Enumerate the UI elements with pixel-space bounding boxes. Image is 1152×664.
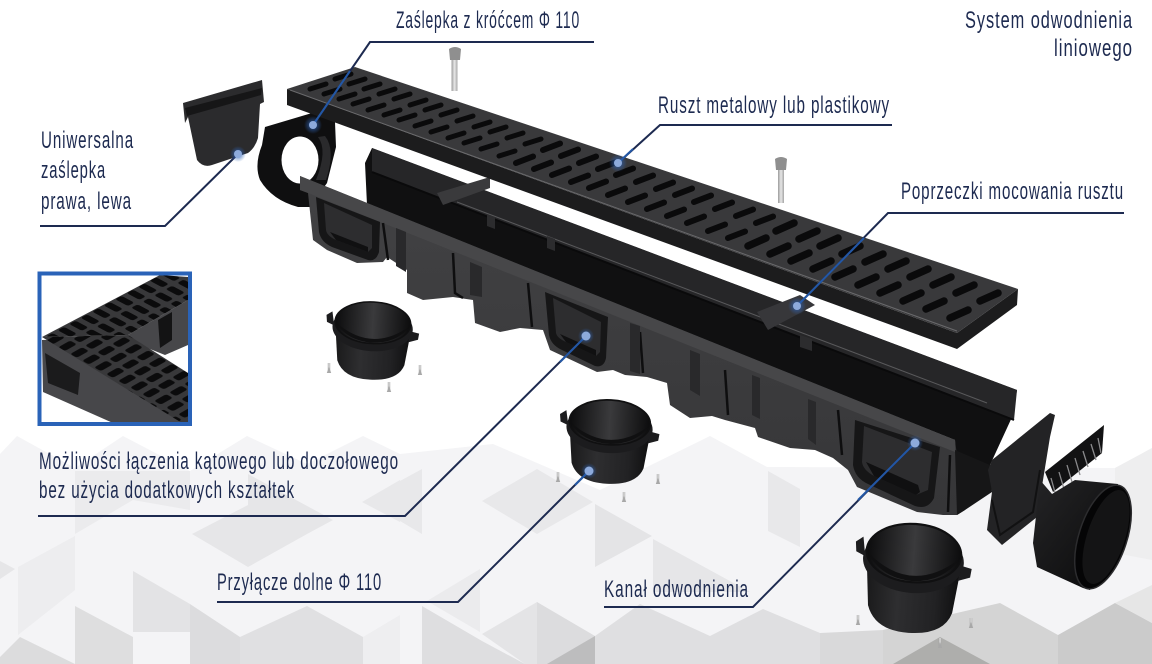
label: Przyłącze dolne: Przyłącze dolne Φ 110 [217, 569, 382, 596]
label: Uniwersalna zaślepka [41, 127, 134, 215]
icon: right outlet with grille [1033, 425, 1143, 596]
icon: cross bar left [437, 177, 490, 205]
leader line: Przyłącze dolne [217, 463, 597, 602]
icon: screw 2 [775, 157, 787, 203]
label: Możliwości łączenia: Możliwości łączenia kątowego lub doczołowego [39, 448, 399, 475]
leader line: Ruszt metalowy [609, 125, 892, 172]
label: Możliwości łączenia [39, 448, 399, 504]
icon: channel back wall [365, 148, 1017, 515]
pockets [316, 197, 380, 260]
label: Uniwersalna zaślepka: Uniwersalna [41, 127, 134, 154]
leader line: Poprzeczki [788, 213, 1124, 315]
icon: bottom connector 3 [850, 520, 975, 648]
icon: channel front wall [300, 176, 957, 515]
icon: metal grate [287, 67, 1018, 349]
label: Kanał odwodnienia: Kanał odwodnienia [604, 576, 749, 603]
icon: left end cap [183, 80, 264, 166]
label: Uniwersalna zaślepka: prawa, lewa [41, 188, 132, 215]
heading: system title [965, 7, 1133, 62]
label: Uniwersalna zaślepka: zaślepka [41, 157, 106, 184]
icon: cross bar right [757, 295, 815, 330]
icon: bottom connector 1 [323, 300, 422, 392]
leader line: Możliwości łączenia [38, 328, 594, 516]
label: Ruszt metalowy: Ruszt metalowy lub plastikowy [658, 92, 890, 119]
icon: screw 1 [449, 47, 461, 91]
grate slots [310, 74, 998, 318]
leader line: Uniwersalna zaślepka [40, 146, 246, 226]
icon: end cap with 110 spigot [257, 113, 336, 207]
icon: right end plate [955, 413, 1055, 545]
icon: bottom connector 2 [556, 397, 661, 502]
label: Możliwości łączenia: bez użycia dodatkowych kształtek [39, 477, 295, 504]
leader line: Kanał odwodnienia [604, 435, 923, 607]
label: Zaślepka z króćcem: Zaślepka z króćcem Φ 110 [396, 7, 580, 34]
panel: corner joint inset photo [39, 273, 190, 424]
leader line: Zaślepka z króćcem [304, 42, 594, 134]
